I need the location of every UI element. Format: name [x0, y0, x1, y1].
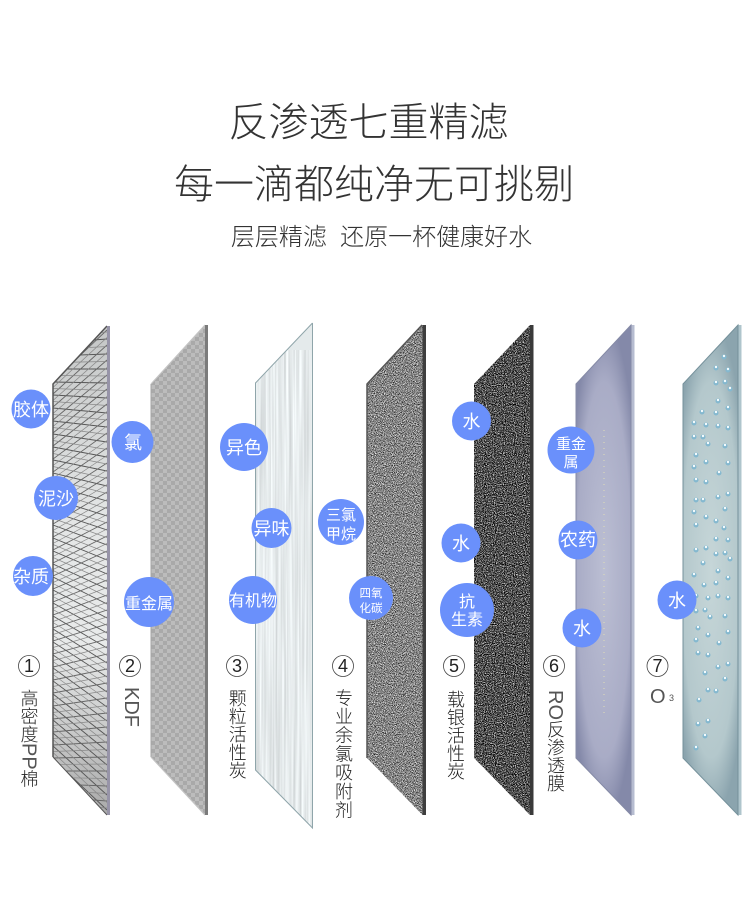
label 1: number and name: 1 — [24, 656, 34, 676]
bubble: 水 (RO): 水 — [573, 619, 591, 639]
bubble: 有机物 — [229, 576, 277, 624]
bubble: 异味 — [252, 508, 292, 548]
panel 5: silver activated carbon noise — [474, 325, 534, 816]
panel 2: KDF checker — [151, 325, 208, 815]
label 3: number and name — [226, 656, 248, 779]
bubble: 杂质 — [13, 556, 53, 596]
bubble: 异味: 异味 — [254, 519, 290, 539]
bubble: 重金属 (RO): 属 — [563, 454, 579, 471]
bubble: 农药 — [558, 520, 598, 560]
bubble: 异色 — [220, 423, 268, 471]
label 5: number and name: 载银活性炭 — [445, 690, 465, 780]
label 2: number and name: 2 — [125, 656, 135, 676]
bubble: 四氧化碳 — [349, 576, 393, 620]
bubble: 水 (O3) — [658, 580, 696, 620]
bubble: 三氯甲烷: 甲烷 — [326, 526, 356, 543]
label 4: number and name: 专业余氯吸附剂 — [333, 688, 353, 819]
bubble: 有机物: 有机物 — [229, 592, 277, 610]
bubble: 水 (RO) — [562, 608, 602, 648]
bubble: 异色: 异色 — [226, 438, 262, 458]
bubble: 泥沙: 泥沙 — [38, 489, 74, 509]
label 6: number and name: 6 — [549, 656, 559, 676]
label 7: number and name: 7 — [652, 656, 663, 676]
bubble: 水 (silver carbon, top): 水 — [462, 412, 480, 432]
label 6: number and name: RO 反渗透膜 — [544, 690, 566, 792]
panel 7: O3 with droplets — [683, 325, 742, 815]
bubble: 抗生素: 生素 — [451, 611, 483, 629]
bubble: 水 (silver carbon, middle): 水 — [452, 534, 470, 554]
label 4: number and name: 4 — [338, 656, 348, 676]
label 5: number and name — [444, 656, 465, 780]
label 3: number and name: 颗粒活性炭 — [227, 689, 247, 779]
bubble: 重金属 (RO): 重金 — [556, 436, 586, 453]
panel 6: RO membrane — [576, 325, 634, 815]
bubble: 三氯甲烷 — [318, 499, 364, 545]
bubble: 重金属 — [124, 577, 174, 627]
title: line one: 反渗透七重精滤 — [228, 101, 508, 145]
bubble: 水 (silver carbon, top) — [452, 402, 491, 440]
label 3: number and name: 3 — [232, 656, 242, 676]
panel 4: chlorine adsorbent noise — [367, 325, 426, 816]
bubble: 农药: 农药 — [560, 530, 596, 550]
label 7: number and name: O — [650, 686, 666, 708]
bubble: 胶体 — [12, 390, 50, 428]
label 7: number and name: 3 — [669, 693, 674, 703]
bubble: 氯 — [112, 421, 154, 463]
label 1: number and name: 高密度 PP 棉 — [18, 689, 40, 788]
panel 1: high density PP cotton mesh — [53, 323, 110, 817]
bubble: 三氯甲烷: 三氯 — [326, 507, 356, 524]
bubble: 水 (silver carbon, middle) — [442, 524, 480, 562]
label 2: number and name: KDF — [120, 687, 142, 727]
bubble: 抗生素: 抗 — [459, 593, 475, 611]
label 5: number and name: 5 — [449, 656, 459, 676]
bubble: 杂质: 杂质 — [13, 567, 49, 587]
bubble: 重金属: 重金属 — [125, 595, 173, 613]
bubble: 氯: 氯 — [124, 433, 142, 453]
title: line two: 每一滴都纯净无可挑剔 — [174, 163, 574, 207]
label 2: number and name — [120, 656, 142, 727]
droplets — [694, 356, 730, 748]
subtitle: 层层精滤 还原一杯健康好水 — [231, 224, 532, 251]
bubble: 四氧化碳: 四氧 — [360, 586, 383, 600]
bubble: 四氧化碳: 化碳 — [360, 601, 383, 615]
panel 3: granular activated carbon — [255, 323, 313, 830]
bubble: 泥沙 — [34, 476, 78, 520]
bubble: 水 (O3): 水 — [668, 591, 686, 611]
bubble: 抗生素 — [440, 583, 494, 637]
label 7: number and name — [647, 656, 674, 708]
bubble: 胶体: 胶体 — [13, 400, 49, 420]
bubble: 重金属 (RO) — [548, 426, 594, 474]
